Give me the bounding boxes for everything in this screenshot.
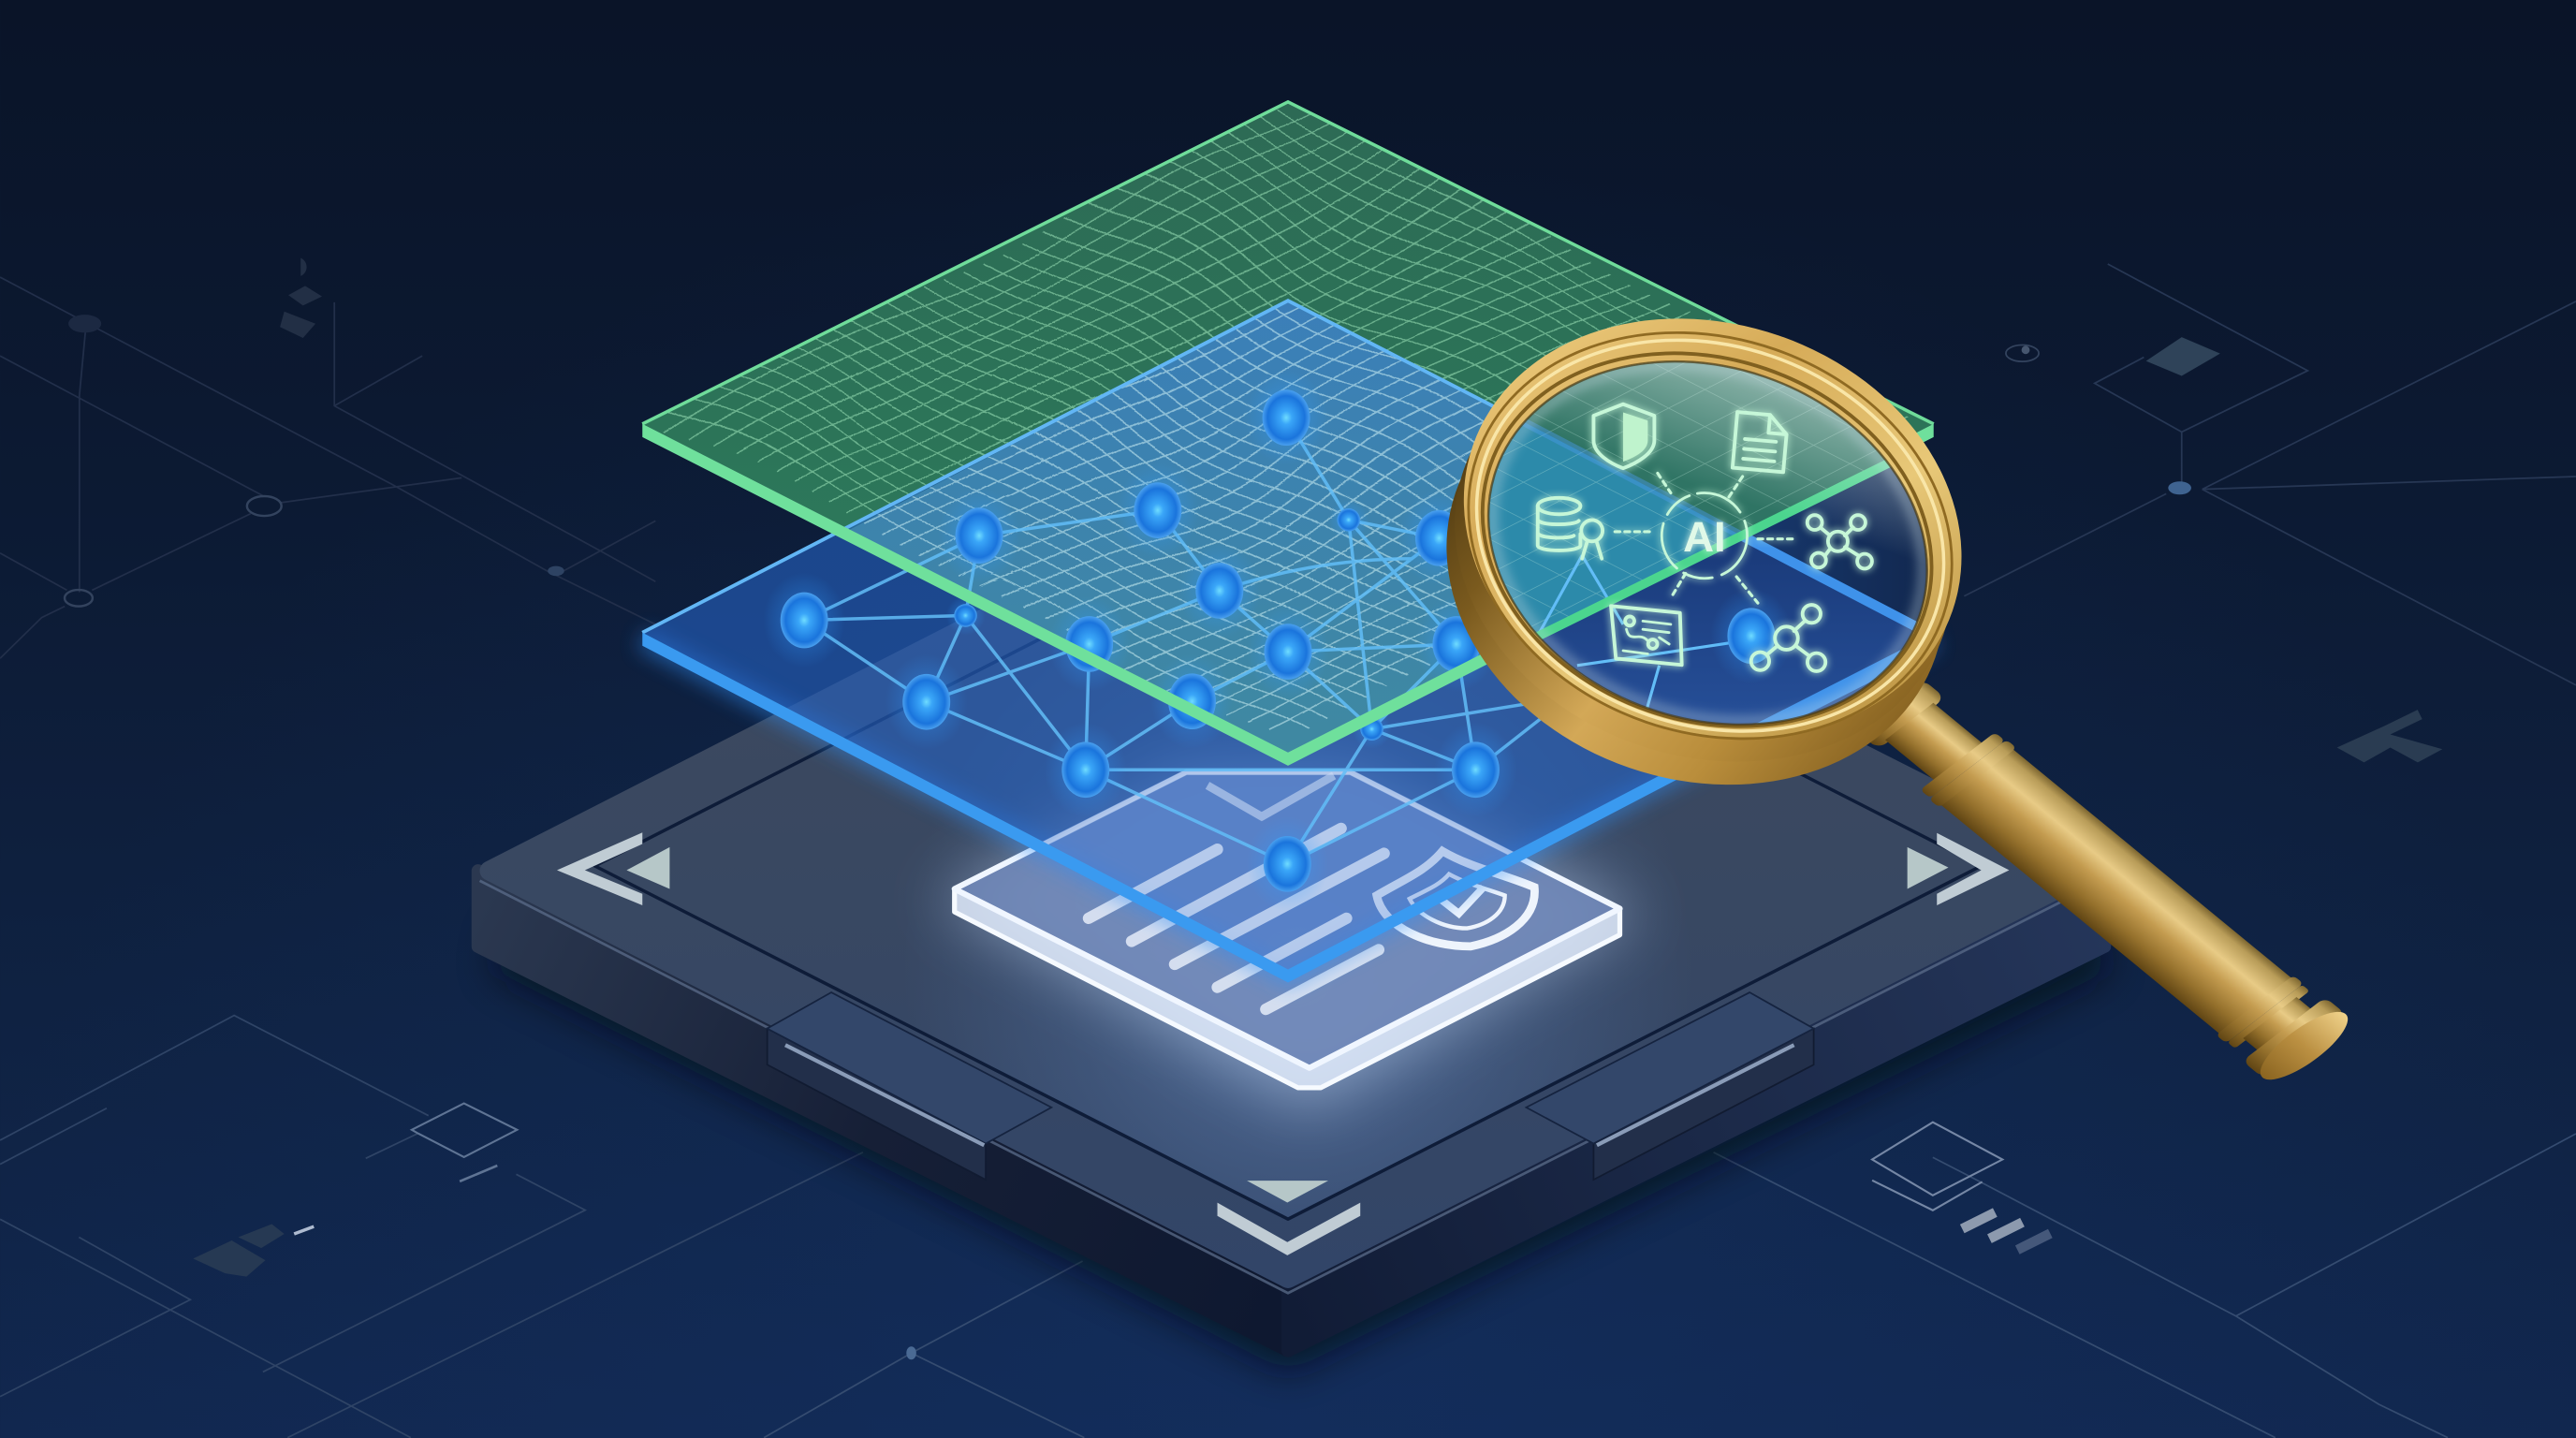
glass document slab: [936, 764, 1643, 1109]
icon: database with ribbon: [1538, 498, 1603, 559]
blue plane front edge: [642, 633, 1934, 983]
green plane warped grid: [663, 112, 1913, 736]
lens blue line lower: [1741, 536, 1971, 655]
icon: network lower: [1751, 605, 1825, 671]
lens lower blue band: [1756, 649, 1903, 725]
icon: connector dashes: [1615, 473, 1795, 603]
lens left blurred node: [1412, 503, 1479, 581]
lens network lines: [1538, 555, 1734, 723]
magnifier handle: [1848, 673, 2360, 1089]
background circuit lines: upper left: [0, 258, 655, 658]
lens blue node: [1710, 588, 1793, 683]
green plane: [642, 102, 1934, 753]
lens bottom wedge: [1541, 618, 1913, 725]
document glow: [936, 764, 1643, 1109]
right block: [1526, 992, 1814, 1180]
platform shadow: [493, 920, 2111, 1372]
document flap: [1208, 775, 1334, 816]
lens glare: [1439, 304, 1977, 782]
platform right side: [1288, 871, 2104, 1351]
lens edge shade: [1443, 308, 1972, 778]
lens base: [1488, 361, 1927, 725]
icon: document: [1733, 412, 1788, 472]
overlap warped grid: [864, 307, 1485, 730]
platform left side: [478, 871, 1288, 1351]
blue plane fill: [642, 301, 1934, 969]
document text lines: [1089, 829, 1384, 1009]
overlap tint: [844, 301, 1732, 759]
lens outline: [1439, 304, 1977, 782]
platform inner panel outline: [594, 513, 1982, 1219]
lens left wedge: [1488, 423, 1737, 633]
icon: AI badge: [1661, 493, 1748, 579]
right chevron and triangle: [1908, 833, 2009, 905]
icon: AI badge: AI: [1683, 513, 1726, 561]
blue plane glow: [642, 639, 1934, 976]
network links: [804, 418, 1577, 864]
lens right wedge: [1752, 464, 1927, 622]
magnifying glass: [1446, 318, 2348, 1080]
magnifier rim depth: [1389, 277, 2010, 850]
document shield: [1377, 851, 1534, 946]
left block: [768, 992, 1051, 1180]
document top face: [955, 772, 1620, 1068]
icon: shield: [1593, 404, 1654, 468]
background circuit lines: lower right and bottom centre: [764, 1123, 2576, 1438]
network nodes: [763, 370, 1516, 912]
lens top wedge: [1526, 361, 1885, 534]
background circuit lines: top right: [1964, 264, 2576, 762]
icon: diagram card: [1611, 606, 1682, 665]
green plane front edge: [642, 424, 1934, 766]
green plane fill: [642, 102, 1934, 753]
blue plane: [630, 299, 1946, 996]
document seen through blue plane: [1043, 770, 1513, 970]
lens icons: [1538, 404, 1872, 671]
lens grid: [1489, 363, 1876, 627]
bottom chevron and triangle: [1218, 1181, 1360, 1255]
platform base: [478, 463, 2111, 1372]
background circuit lines: lower left: [0, 1016, 863, 1438]
magnifier rim front: [1407, 253, 2019, 803]
lens blue line upper: [1445, 381, 1741, 536]
blue plane top edges: [642, 301, 1934, 633]
platform top surface: [490, 463, 2093, 1278]
document extrusion: [955, 888, 1620, 1088]
platform inner glow: [594, 513, 1982, 1219]
left chevron and triangle: [557, 832, 669, 905]
magnifier lens: [1488, 361, 1927, 725]
icon: network upper: [1808, 515, 1872, 568]
rim inner grooves: [1413, 269, 2008, 802]
lens green line: [1445, 422, 1971, 682]
platform edge bevel: [480, 881, 2102, 1293]
green plane top edges: [642, 102, 1934, 424]
